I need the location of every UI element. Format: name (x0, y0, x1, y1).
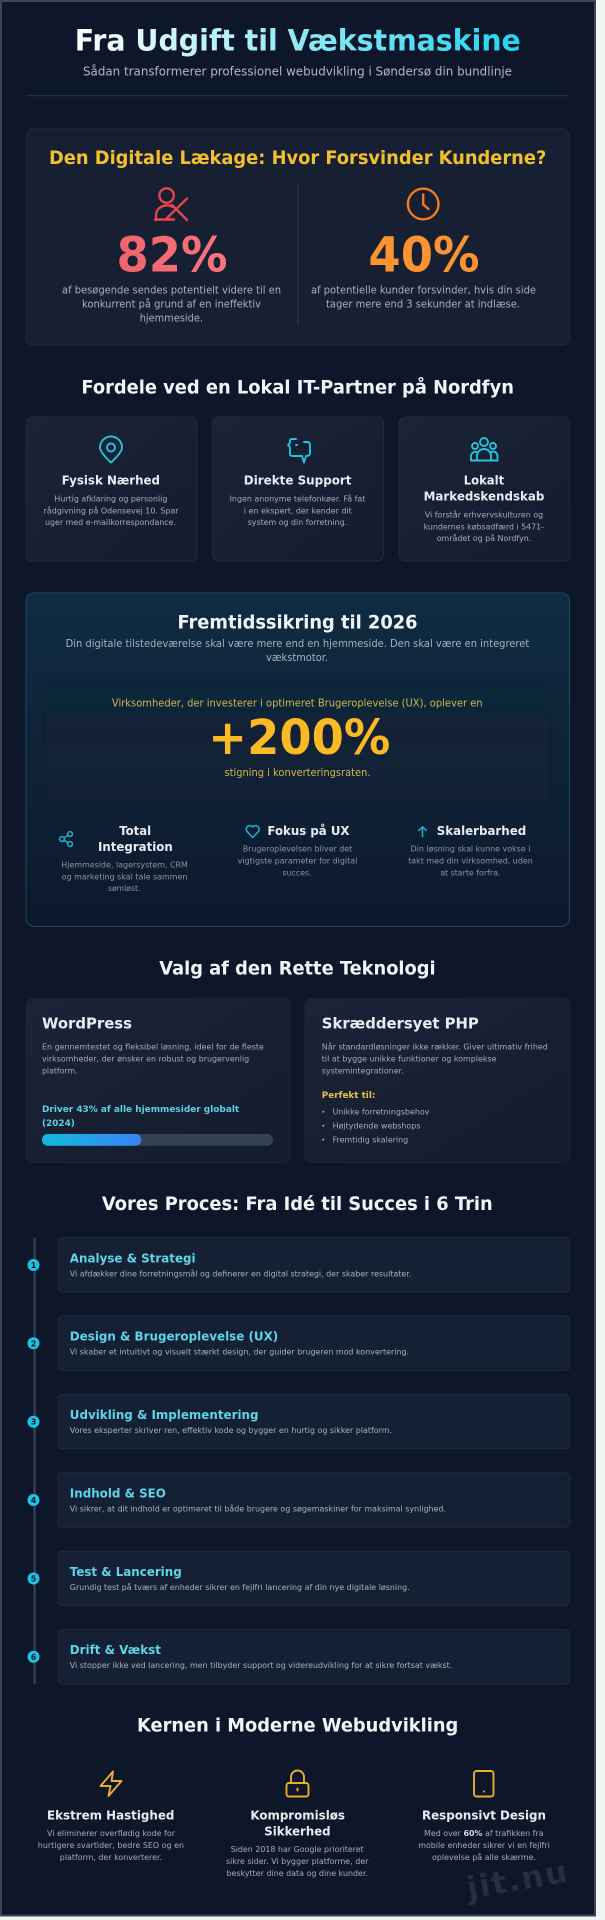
feature: total integration: Integration (98, 840, 173, 854)
icon: lightning bolt (100, 1772, 122, 1796)
icon: share (60, 832, 72, 846)
card: custom PHP: systemintegrationer. (322, 1065, 404, 1075)
step 6: 6 (31, 1653, 37, 1662)
card: direct support: i en ekspert, der kender dit (244, 505, 353, 515)
step 3 (28, 1394, 570, 1449)
callout: +200% (46, 680, 548, 798)
column: security: sikre sider. Vi bygger platforme, der (226, 1856, 369, 1866)
step 1 (28, 1238, 570, 1292)
icon: tablet (474, 1771, 494, 1796)
icon: speech bubble (288, 439, 310, 462)
heading: technology: Valg af den Rette Teknologi (159, 959, 436, 980)
column: responsive: mobile enheder sikrer vi en fejlfri (418, 1840, 550, 1850)
panel: future proofing 2026 (26, 593, 570, 926)
header (75, 24, 521, 78)
list: perfect for: Unikke forretningsbehov (333, 1107, 430, 1117)
step 2: 2 (31, 1339, 36, 1348)
list: perfect for: Fremtidig skalering (333, 1134, 408, 1144)
feature: total integration: og marketing skal tale sammen (62, 871, 188, 881)
column: responsive: Med over 60% af trafikken fra (424, 1828, 544, 1838)
card: direct support: Ingen anonyme telefonkøer. Få fat (230, 493, 366, 503)
card: local market knowledge: Vi forstår erhvervskulturen og (425, 509, 543, 519)
heading: process: Vores Proces: Fra Idé til Succes i 6 Trin (102, 1194, 493, 1215)
heading: leakage: Den Digitale Lækage: Hvor Forsvinder Kunderne? (49, 148, 546, 169)
icon: lost user (155, 188, 187, 220)
feature: scalability: at starte forfra. (440, 867, 500, 877)
card: direct support (212, 417, 384, 561)
heading: future proofing: Fremtidssikring til 2026 (178, 613, 418, 634)
feature: total integration: sømløst. (108, 883, 140, 893)
card: physical proximity: Fysisk Nærhed (62, 474, 160, 488)
step 3: 3 (31, 1418, 36, 1427)
subtitle: Sådan transformerer professionel webudvikling i Søndersø din bundlinje (83, 63, 512, 78)
column: speed: hurtigere svartider, bedre SEO og en (38, 1840, 184, 1850)
column: speed: Vi eliminerer overflødig kode for (47, 1828, 176, 1838)
column: security: Kompromisløs (250, 1808, 345, 1822)
stat: 40%: tager mere end 3 sekunder at indlæse. (326, 300, 520, 311)
watermark: jit.nu (462, 1854, 570, 1907)
icon: people (471, 438, 498, 460)
icon: map pin (100, 437, 122, 462)
intro text: Din digitale tilstedeværelse skal være mere end en hjemmeside. Den skal være en integreret (66, 639, 529, 650)
stat: 40% (311, 228, 536, 311)
column: responsive: oplevelse på alle skærme. (432, 1852, 536, 1862)
step 4 (28, 1473, 570, 1527)
card: custom PHP (305, 998, 570, 1162)
step 6 (28, 1630, 570, 1684)
feature: UX focus: Brugeroplevelsen bliver det (243, 843, 353, 853)
step 5 (28, 1551, 570, 1606)
card: WordPress: Driver 43% af alle hjemmesider globalt (42, 1105, 240, 1115)
heading: local partner: Fordele ved en Lokal IT-Partner på Nordfyn (81, 376, 514, 398)
stat: 82%: af besøgende sendes potentielt videre til en (62, 286, 281, 297)
callout: +200%: Virksomheder, der investerer i optimeret Brugeroplevelse (UX), oplever en (112, 699, 483, 710)
card: direct support: system og din forretning. (248, 517, 347, 527)
card: custom PHP: Når standardløsninger ikke rækker. Giver ultimativ frihed (322, 1041, 548, 1051)
step 3: Vores eksperter skriver ren, effektiv kode og bygger en hurtig og sikker platform. (70, 1425, 392, 1435)
card: WordPress: En gennemtestet og fleksibel løsning, ideel for de fleste (42, 1041, 264, 1051)
step 6: Vi stopper ikke ved lancering, men tilbyder support og videreudvikling for at sikre fortsat vækst. (70, 1660, 452, 1670)
column: security: beskytter dine data og dine kunder. (226, 1868, 368, 1878)
feature: UX focus: Fokus på UX (267, 824, 350, 838)
callout: +200%: stigning i konverteringsraten. (224, 768, 370, 779)
column: speed (38, 1772, 184, 1862)
card: physical proximity: Hurtig afklaring og personlig (54, 493, 167, 503)
card: physical proximity: rådgivning på Odensevej 10. Spar (44, 505, 179, 515)
feature: total integration: Hjemmeside, lagersystem, CRM (61, 859, 188, 869)
list: perfect for: Højtydende webshops (333, 1121, 420, 1131)
stat: 82%: konkurrent på grund af en ineffektiv (82, 298, 261, 311)
icon: clock (408, 189, 439, 219)
step 2 (28, 1316, 570, 1370)
step 5: Test & Lancering (70, 1565, 182, 1579)
stat: 40%: 40% (368, 228, 480, 284)
card: local market knowledge: Lokalt (464, 474, 504, 488)
card: WordPress: platform. (42, 1065, 78, 1075)
card: WordPress: virksomheder, der ønsker en robust og brugervenlig (42, 1053, 249, 1063)
heading: core: Kernen i Moderne Webudvikling (137, 1716, 458, 1737)
card: WordPress (26, 998, 290, 1162)
feature: scalability: Skalerbarhed (437, 824, 526, 838)
column: security (226, 1770, 369, 1878)
title: Fra Udgift til Vækstmaskine (75, 24, 521, 58)
feature: UX focus: succes. (282, 867, 312, 877)
step 6: Drift & Vækst (70, 1643, 161, 1657)
step 1: Analyse & Strategi (70, 1251, 196, 1265)
panel: digital leakage (26, 129, 570, 345)
feature: scalability: Din løsning skal kunne vokse i (410, 843, 530, 853)
step 4: Vi sikrer, at dit indhold er optimeret til både brugere og søgemaskiner for maksimal synlighed. (70, 1503, 446, 1513)
column: speed: Ekstrem Hastighed (47, 1808, 174, 1822)
card: WordPress: (2024) (42, 1119, 75, 1129)
card: physical proximity (26, 417, 197, 561)
feature: total integration (60, 824, 188, 893)
step 5: Grundig test på tværs af enheder sikrer en fejlfri lancering af din nye digitale løsning. (70, 1582, 410, 1592)
callout: +200%: +200% (208, 710, 390, 766)
column: speed: platform, der konverterer. (60, 1852, 162, 1862)
section: process timeline (28, 1194, 570, 1684)
card: local market knowledge: området og på Nordfyn. (437, 533, 531, 543)
feature: UX focus: vigtigste parameter for digital (238, 855, 357, 865)
section: local partner (26, 376, 570, 561)
step 1: 1 (31, 1261, 37, 1270)
card: local market knowledge: Markedskendskab (424, 490, 545, 504)
card: custom PHP: Skræddersyet PHP (322, 1015, 479, 1033)
intro text: vækstmotor. (266, 653, 328, 664)
card: custom PHP: Perfekt til: (322, 1091, 375, 1101)
column: responsive: Responsivt Design (422, 1808, 546, 1822)
step 5: 5 (31, 1574, 37, 1584)
intro text (66, 639, 529, 664)
section: technology choice (26, 959, 570, 1162)
stat: 82%: hjemmeside. (140, 314, 203, 325)
list: perfect for (322, 1107, 430, 1144)
stat: 82%: 82% (116, 228, 228, 284)
step 4: Indhold & SEO (70, 1486, 166, 1500)
step 2: Design & Brugeroplevelse (UX) (70, 1330, 278, 1344)
icon: arrow up (419, 827, 426, 836)
column: security: Sikkerhed (264, 1824, 331, 1838)
feature: total integration: Total (119, 824, 151, 838)
column: responsive (418, 1771, 550, 1862)
feature: scalability: takt med din virksomhed, uden (408, 855, 533, 865)
feature: UX focus (238, 824, 357, 877)
step 3: Udvikling & Implementering (70, 1408, 258, 1422)
card: physical proximity: uger med e-mailkorrespondance. (45, 517, 176, 527)
icon: padlock (286, 1770, 308, 1796)
feature: scalability (408, 824, 533, 877)
step 1: Vi afdækker dine forretningsmål og definerer en digital strategi, der skaber resultater. (70, 1268, 411, 1278)
card: local market knowledge (399, 417, 570, 561)
section: core of modern web development (38, 1716, 550, 1878)
progress bar: 43% (42, 1134, 273, 1146)
column: security: Siden 2018 har Google prioriteret (231, 1844, 365, 1854)
card: local market knowledge: kundernes købsadfærd i 5471- (424, 521, 544, 531)
stat: 82% (62, 228, 281, 325)
icon: heart (246, 826, 259, 838)
card: WordPress: WordPress (42, 1015, 132, 1033)
card: direct support: Direkte Support (244, 474, 352, 488)
card: custom PHP: til at bygge unikke funktioner og komplekse (322, 1053, 496, 1063)
step 2: Vi skaber et intuitivt og visuelt stærkt design, der guider brugeren mod konvertering. (70, 1347, 409, 1357)
step 4: 4 (31, 1496, 37, 1505)
stat: 40%: af potentielle kunder forsvinder, hvis din side (311, 286, 536, 297)
